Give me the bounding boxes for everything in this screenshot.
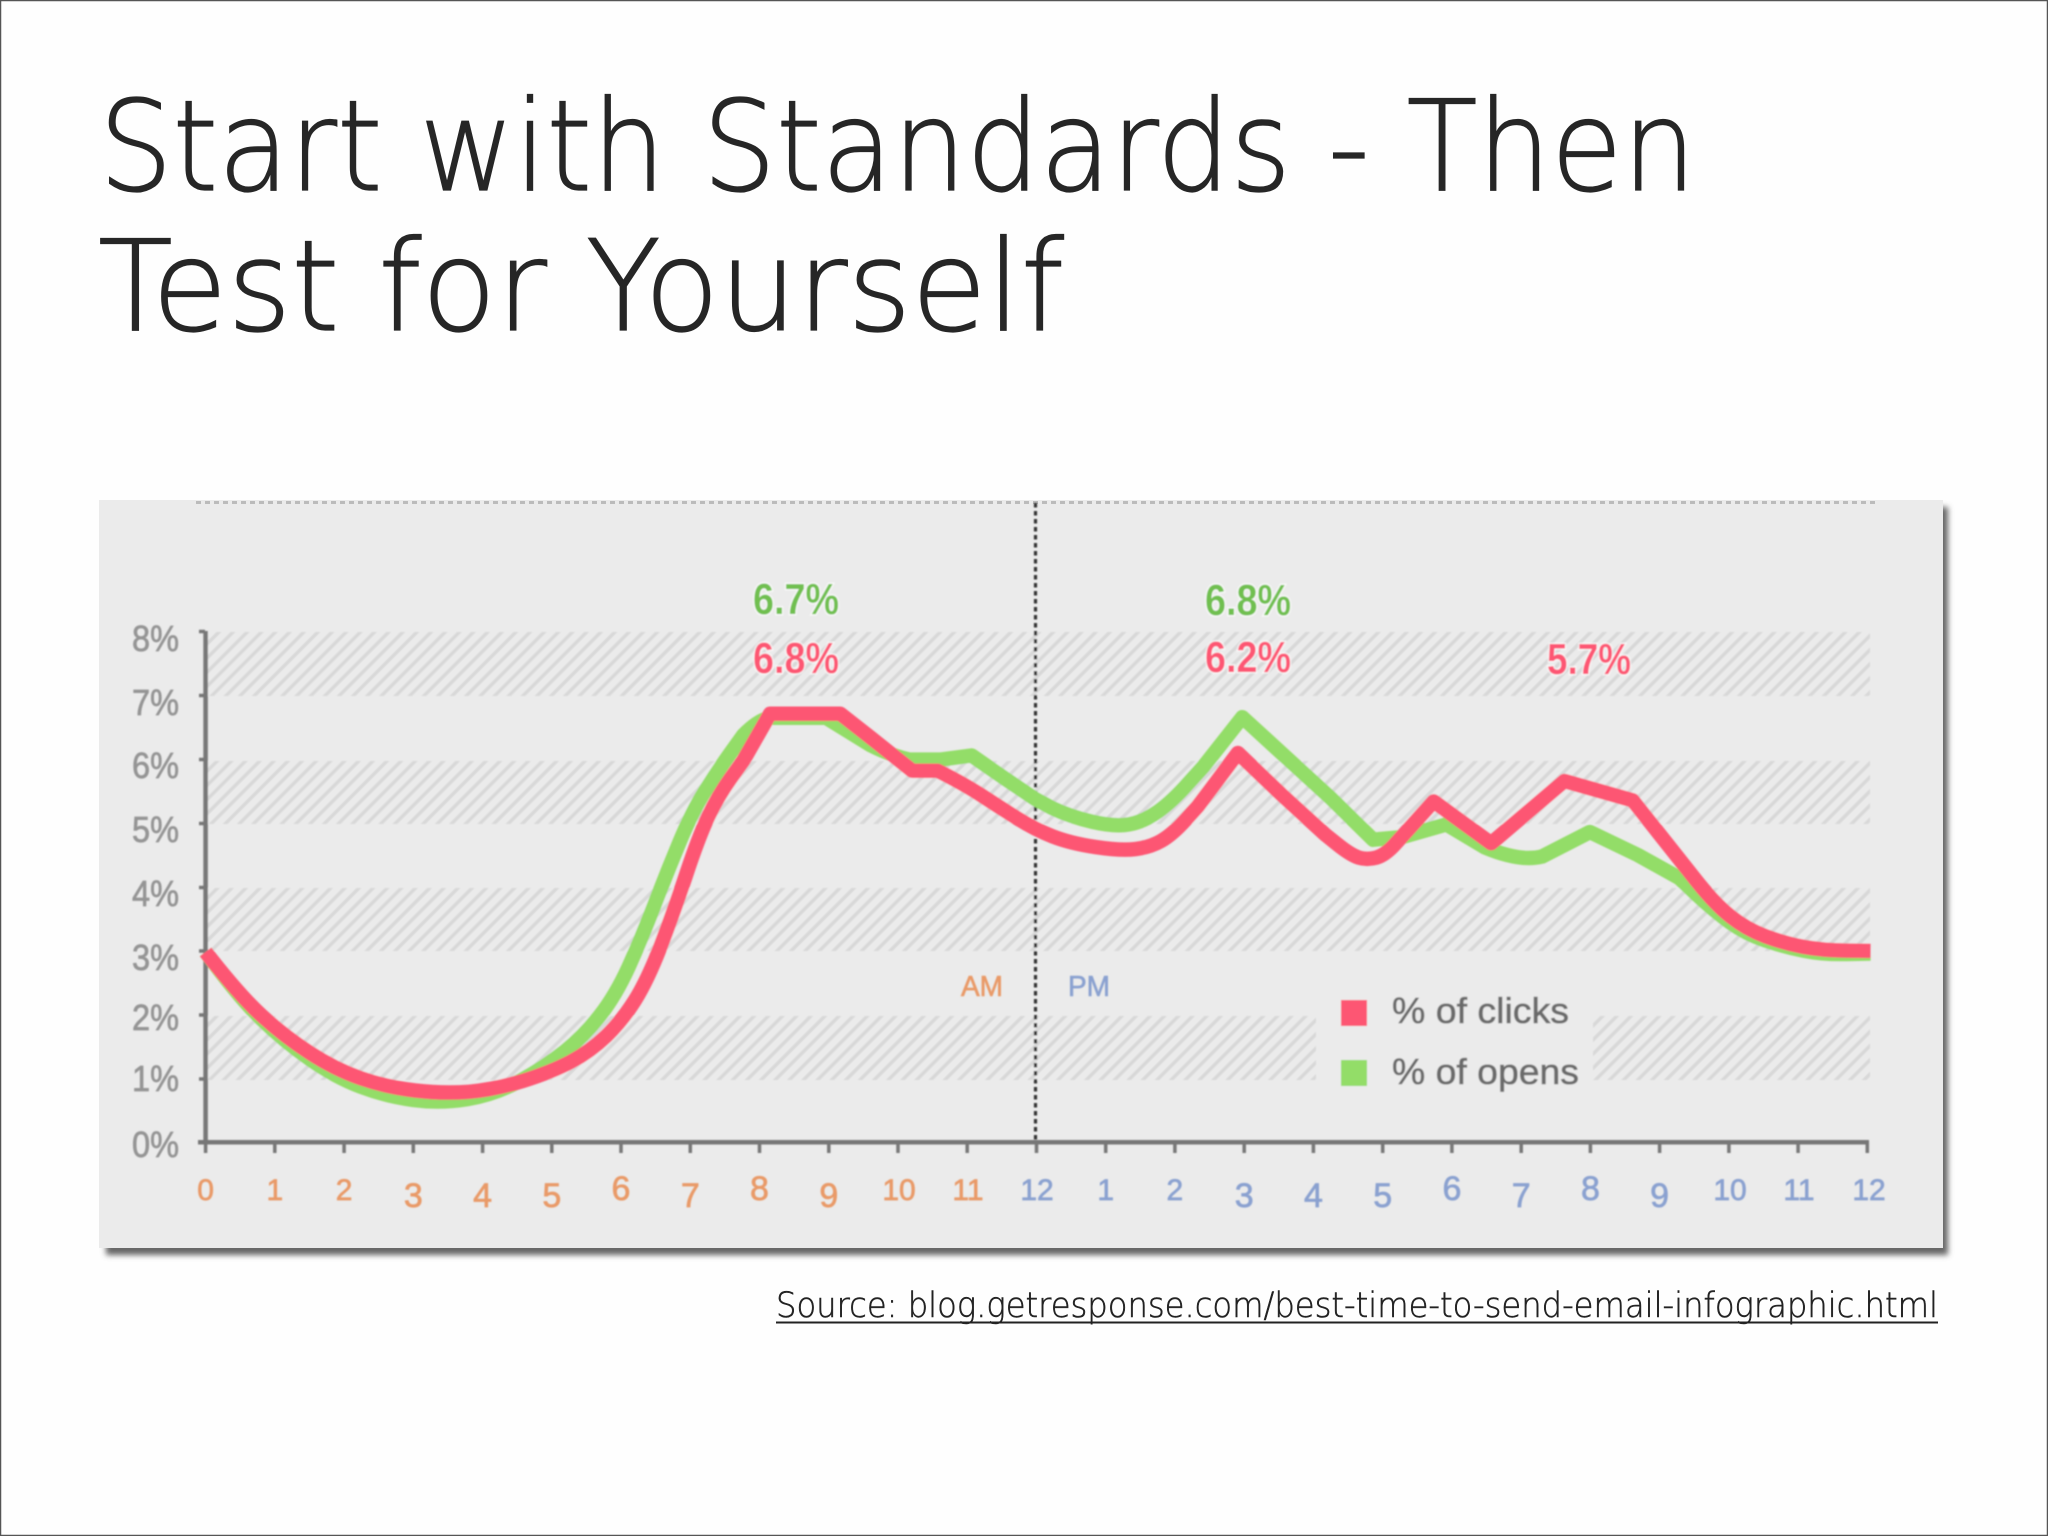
- x axis labels AM: 10: [882, 1174, 916, 1207]
- title: Test for Yourself: [98, 213, 1064, 360]
- AM PM divider: [1034, 503, 1037, 1141]
- x axis labels PM: 7: [1512, 1177, 1531, 1215]
- x axis labels AM: 8: [750, 1170, 769, 1208]
- x axis labels PM: 8: [1581, 1170, 1600, 1208]
- x axis labels PM: 12: [1020, 1174, 1054, 1207]
- x axis labels PM: [1020, 1170, 1886, 1215]
- y axis labels: 7%: [132, 682, 179, 723]
- x axis labels PM: 12: [1852, 1174, 1886, 1207]
- line: % of clicks: [206, 714, 1871, 1093]
- panel: chart image: [99, 500, 1948, 1255]
- x axis labels AM: 6: [612, 1170, 630, 1208]
- legend: % of clicks: [1392, 990, 1569, 1031]
- line: % of opens: [206, 717, 1871, 1102]
- peak labels: 6.8%: [753, 634, 839, 683]
- y axis labels: 6%: [132, 745, 179, 786]
- source link: Source: blog.getresponse.com/best-time-to-send-email-infographic.html: [776, 1286, 1938, 1326]
- peak labels: 6.2%: [1205, 633, 1291, 682]
- x axis labels PM: 11: [1783, 1174, 1815, 1207]
- x axis labels AM: 7: [681, 1177, 700, 1215]
- peak labels: [753, 575, 1631, 684]
- y axis labels: [132, 618, 179, 1165]
- x axis labels AM: 2: [336, 1174, 352, 1207]
- x axis labels PM: 1: [1097, 1174, 1114, 1207]
- x axis labels AM: [197, 1170, 984, 1215]
- title: [98, 73, 1696, 360]
- x axis labels AM: 4: [473, 1177, 492, 1215]
- peak labels: 6.8%: [1205, 576, 1291, 625]
- y axis labels: 4%: [132, 873, 179, 914]
- x axis labels PM: 3: [1235, 1177, 1254, 1215]
- title: Start with Standards - Then: [99, 73, 1696, 220]
- AM label: AM: [961, 971, 1003, 1003]
- legend: [1316, 990, 1593, 1092]
- hatched bands: [206, 632, 1870, 1080]
- axes: [198, 631, 1869, 1153]
- x axis labels PM: 2: [1167, 1174, 1183, 1207]
- x axis labels AM: 3: [404, 1177, 423, 1215]
- peak labels: 5.7%: [1547, 635, 1631, 684]
- y axis labels: 2%: [132, 997, 179, 1038]
- y axis labels: 3%: [132, 937, 179, 978]
- x axis labels PM: 5: [1373, 1177, 1392, 1215]
- x axis labels AM: 9: [819, 1177, 838, 1215]
- y axis labels: 1%: [132, 1058, 179, 1099]
- legend: % of opens: [1392, 1051, 1579, 1092]
- x axis labels PM: 4: [1304, 1177, 1323, 1215]
- y axis labels: 8%: [132, 618, 179, 659]
- x axis labels AM: 1: [266, 1174, 283, 1207]
- x axis labels AM: 11: [952, 1174, 984, 1207]
- peak labels: 6.7%: [753, 575, 839, 624]
- PM label: PM: [1068, 971, 1110, 1003]
- x axis labels PM: 9: [1650, 1177, 1669, 1215]
- y axis labels: 5%: [132, 809, 179, 850]
- x axis labels AM: 5: [542, 1177, 561, 1215]
- y axis labels: 0%: [132, 1124, 179, 1165]
- x axis labels PM: 10: [1713, 1174, 1747, 1207]
- x axis labels PM: 6: [1442, 1170, 1461, 1208]
- x axis labels AM: 0: [197, 1174, 214, 1207]
